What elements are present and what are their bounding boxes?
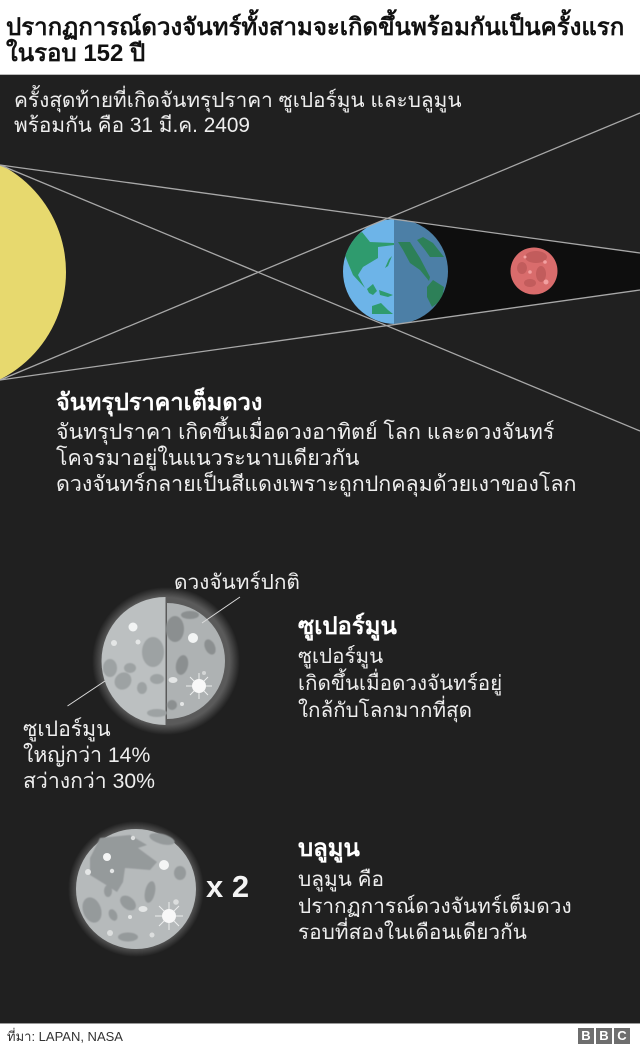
logo: BBC: B <box>599 1028 609 1043</box>
label: supermoon stats: สว่างกว่า 30% <box>23 770 155 793</box>
text: blue moon description <box>298 868 572 944</box>
text: blue moon description: บลูมูน คือ <box>298 868 384 891</box>
title: ในรอบ 152 ปี <box>6 40 145 67</box>
text: blue moon description: รอบที่สองในเดือนเดียวกัน <box>298 921 527 944</box>
umbra shadow <box>393 219 640 325</box>
text: eclipse description: ดวงจันทร์กลายเป็นสีแดงเพราะถูกปกคลุมด้วยเงาของโลก <box>56 472 576 496</box>
text: last occurrence: พร้อมกัน คือ 31 มี.ค. 2409 <box>14 114 250 137</box>
icon: supermoon comparison <box>92 587 240 735</box>
icon: earth <box>343 219 448 324</box>
text: last occurrence <box>14 85 462 137</box>
logo: BBC: B <box>581 1028 591 1043</box>
logo: BBC: C <box>617 1028 627 1043</box>
icon: blue moon <box>68 821 204 957</box>
rays <box>0 113 640 431</box>
text: supermoon description: เกิดขึ้นเมื่อดวงจันทร์อยู่ <box>298 672 502 695</box>
title <box>6 9 624 67</box>
title: ปรากฏการณ์ดวงจันทร์ทั้งสามจะเกิดขึ้นพร้อมกันเป็นครั้งแรก <box>6 14 624 41</box>
label: supermoon stats: ซูเปอร์มูน <box>23 718 111 741</box>
source: ที่มา: LAPAN, NASA <box>7 1029 123 1044</box>
label: times two: x 2 <box>206 869 249 904</box>
label: normal moon: ดวงจันทร์ปกติ <box>174 571 300 594</box>
text: eclipse description: จันทรุปราคา เกิดขึ้นเมื่อดวงอาทิตย์ โลก และดวงจันทร์ <box>56 420 554 444</box>
text: eclipse description: โคจรมาอยู่ในแนวระนาบเดียวกัน <box>56 446 359 470</box>
text: last occurrence: ครั้งสุดท้ายที่เกิดจันทรุปราคา ซูเปอร์มูน และบลูมูน <box>14 89 462 112</box>
label: supermoon stats <box>23 717 155 793</box>
heading: supermoon: ซูเปอร์มูน <box>298 613 397 640</box>
text: eclipse description <box>56 416 576 497</box>
heading: blue moon: บลูมูน <box>298 835 360 862</box>
icon: sun <box>0 152 66 392</box>
text: supermoon description <box>298 645 502 722</box>
label: supermoon stats: ใหญ่กว่า 14% <box>23 744 150 767</box>
text: blue moon description: ปรากฏการณ์ดวงจันทร์เต็มดวง <box>298 894 572 918</box>
callout line: normal moon <box>202 597 240 623</box>
callout line: supermoon <box>68 681 105 706</box>
text: supermoon description: ซูเปอร์มูน <box>298 645 383 668</box>
icon: red moon <box>510 248 558 294</box>
text: supermoon description: ใกล้กับโลกมากที่สุด <box>298 699 472 722</box>
logo: BBC <box>578 1028 630 1044</box>
heading: total lunar eclipse: จันทรุปราคาเต็มดวง <box>56 389 262 415</box>
